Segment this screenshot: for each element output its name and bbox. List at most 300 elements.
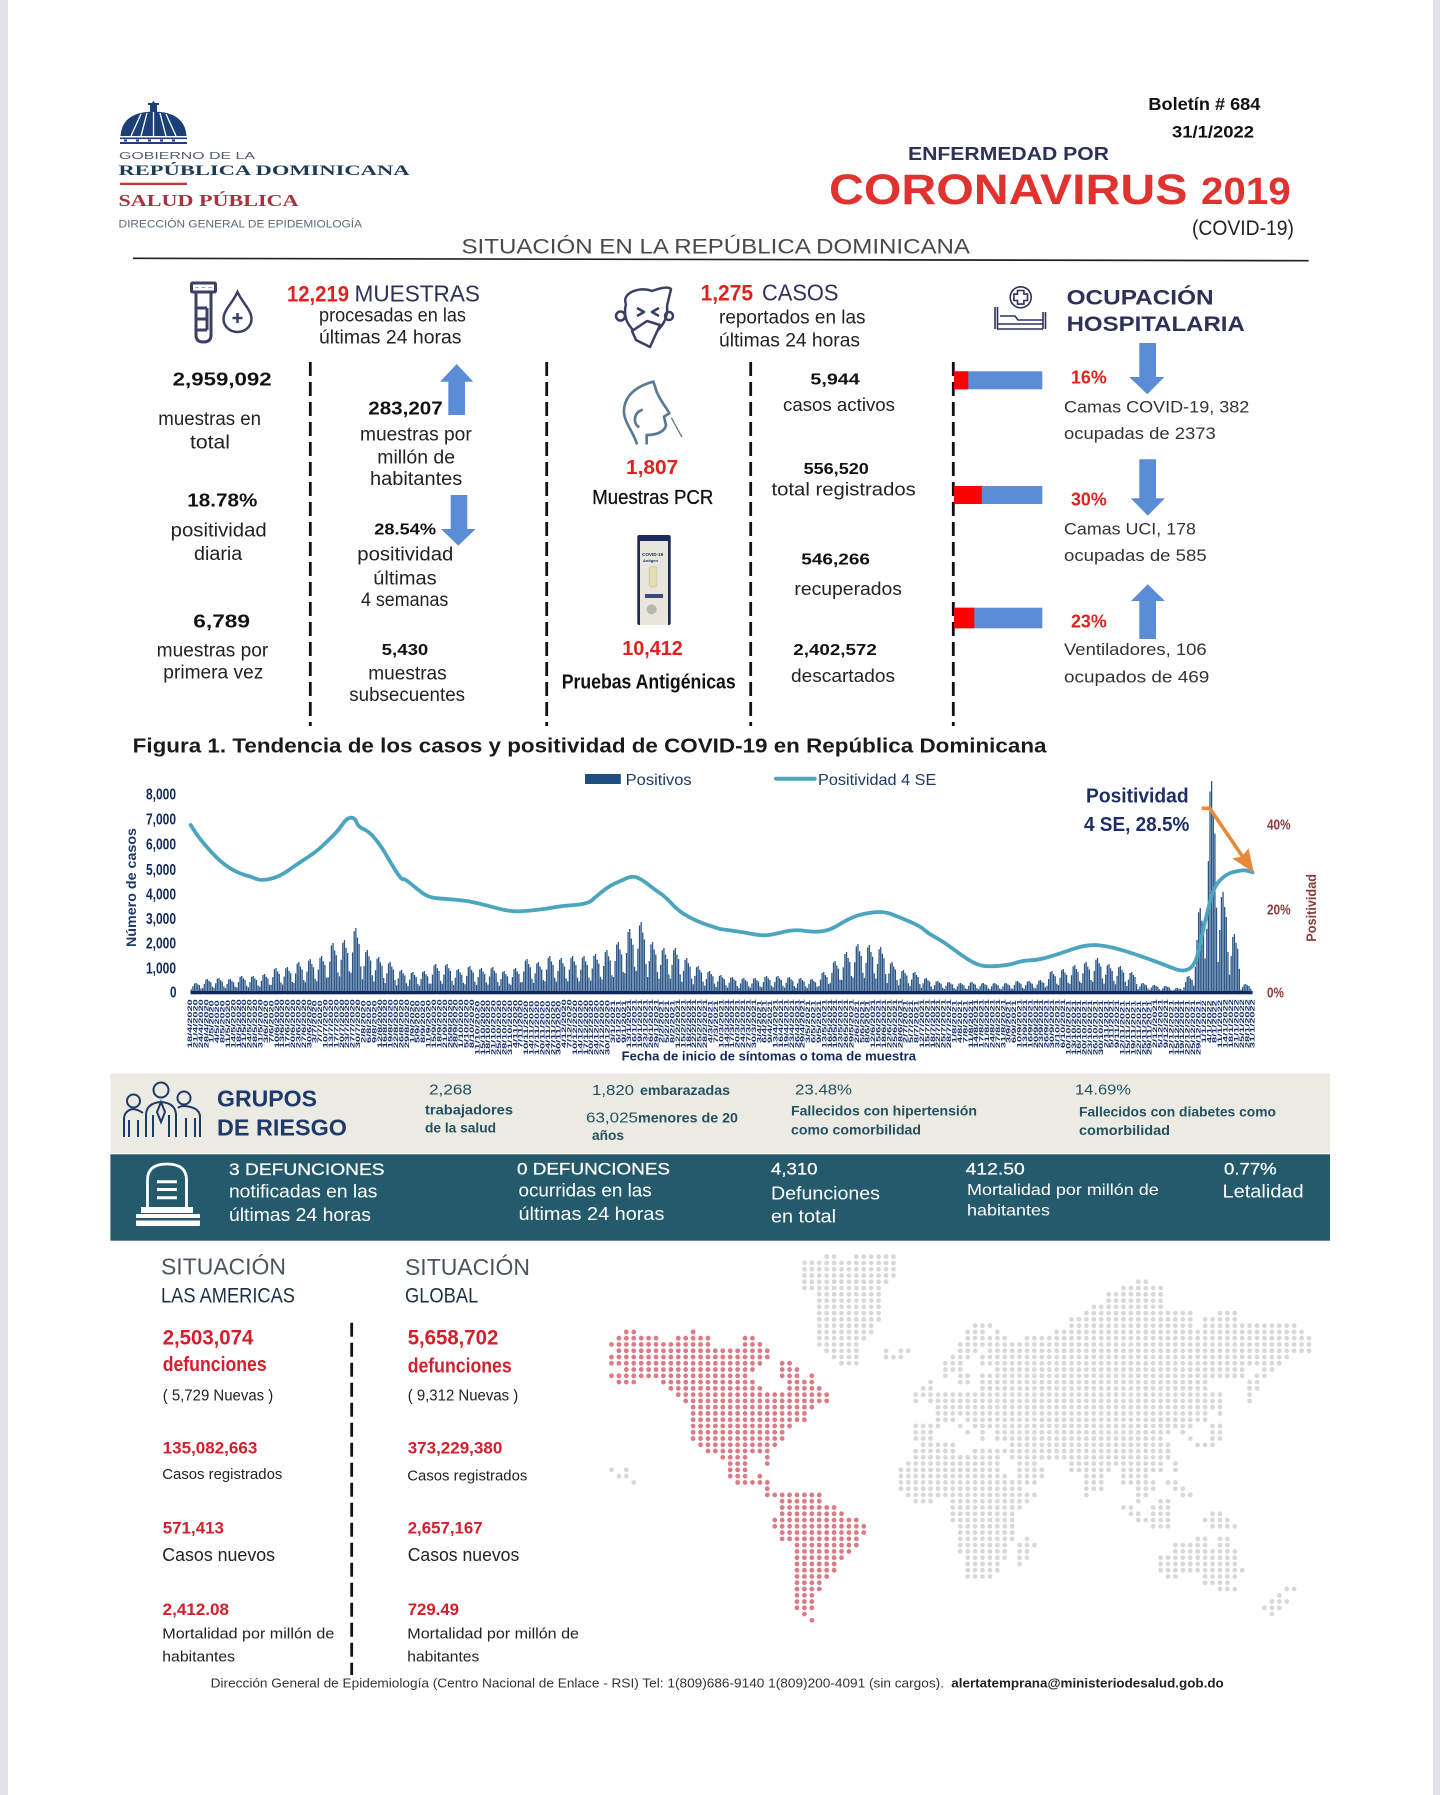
pruebas antigenicas: 10,412 xyxy=(622,637,683,660)
x axis date labels: 17/12/2020 xyxy=(583,1000,590,1055)
panel: situacion global: GLOBAL xyxy=(405,1284,478,1307)
x axis date labels: 30/6/2020 xyxy=(306,1000,313,1049)
logo: gobierno y salud publica: GOBIERNO DE LA xyxy=(119,150,255,162)
defunciones en total: 4,310 xyxy=(771,1160,818,1178)
panel: situacion global: 2,657,167 xyxy=(408,1518,483,1537)
letalidad: Letalidad xyxy=(1222,1182,1304,1202)
bulletin number and date: 31/1/2022 xyxy=(1172,122,1254,141)
x axis date labels: 7/8/2021 xyxy=(962,1000,969,1043)
x axis date labels: 31/5/2020 xyxy=(257,1000,264,1049)
x axis date labels: 15/10/2020 xyxy=(480,1000,487,1055)
defunciones ocurridas: ocurridas en las xyxy=(518,1181,652,1201)
muestras heading: MUESTRAS xyxy=(354,281,480,307)
x axis date labels: 21/4/2020 xyxy=(192,1000,199,1049)
x axis date labels: 20/7/2020 xyxy=(339,1000,346,1049)
logo: gobierno y salud publica: SALUD PÚBLICA xyxy=(118,191,299,210)
x axis date labels: 6/10/2021 xyxy=(1060,1000,1067,1049)
x axis date labels: 14/1/2022 xyxy=(1223,1000,1230,1049)
x axis date labels: 8/9/2020 xyxy=(420,1000,427,1043)
x axis date labels xyxy=(187,1000,1257,1055)
x axis date labels: 24/11/2020 xyxy=(545,1000,552,1054)
x axis date labels: 9/11/2021 xyxy=(1114,1000,1121,1048)
figure heading: Figura 1. Tendencia de los casos y positividad de COVID-19 en República Dominicana xyxy=(133,736,1047,758)
icon: tombstone xyxy=(136,1164,200,1226)
x axis date labels: 1/8/2021 xyxy=(951,1000,958,1043)
panel: situacion las americas: 571,413 xyxy=(163,1518,224,1537)
x axis date labels: 3/1/2021 xyxy=(610,1000,617,1043)
defunciones en total: en total xyxy=(771,1206,836,1226)
x axis date labels: 6/1/2021 xyxy=(615,1000,622,1043)
x axis date labels: 11/1/2022 xyxy=(1217,1000,1224,1048)
x axis date labels: 4/12/2020 xyxy=(561,1000,568,1049)
x axis date labels: 28/5/2020 xyxy=(252,1000,259,1049)
muestras heading: 12,219 xyxy=(287,282,349,307)
x axis date labels: 13/5/2021 xyxy=(821,1000,828,1049)
casos heading: 1,275 xyxy=(701,281,753,306)
diabetes: comorbilidad xyxy=(1079,1122,1170,1138)
chart: casos y positividad xyxy=(123,772,1319,1064)
left axis labels: 2,000 xyxy=(146,935,176,952)
x axis date labels: 9/1/2021 xyxy=(621,1000,628,1043)
panel: casos xyxy=(562,280,916,693)
x axis date labels: 23/9/2021 xyxy=(1038,1000,1045,1049)
x axis date labels: 17/8/2021 xyxy=(979,1000,986,1049)
icon: capitol dome xyxy=(120,101,187,144)
x axis date labels: 26/8/2020 xyxy=(398,1000,405,1049)
x axis date labels: 22/2/2021 xyxy=(691,1000,698,1049)
x axis date labels: 18/1/2022 xyxy=(1228,1000,1235,1049)
x axis date labels: 20/10/2021 xyxy=(1082,1000,1089,1055)
icon: antigen test cassette: COVID-19 xyxy=(642,552,664,557)
x axis date labels: 26/4/2021 xyxy=(794,1000,801,1049)
x axis date labels: 14/5/2020 xyxy=(230,1000,237,1049)
x axis date labels: 4/3/2021 xyxy=(708,1000,714,1043)
embarazadas y menores: embarazadas xyxy=(640,1082,730,1098)
x axis date labels: 7/7/2020 xyxy=(317,1000,324,1043)
panel: situacion las americas: 2,412.08 xyxy=(163,1600,229,1619)
x axis date labels: 8/10/2020 xyxy=(469,1000,476,1049)
x axis date labels: 7/12/2020 xyxy=(567,1000,574,1049)
x axis date labels: 11/5/2020 xyxy=(225,1000,232,1048)
x axis date labels: 24/12/2020 xyxy=(594,1000,601,1055)
annotation: positividad 28.5%: Positividad xyxy=(1086,786,1189,808)
x axis date labels: 18/10/2020 xyxy=(485,1000,492,1055)
casos activos: 5,944 xyxy=(810,372,860,389)
camas uci occupancy xyxy=(954,459,1207,565)
hipertension: como comorbilidad xyxy=(791,1121,921,1137)
mortalidad por millon: 412.50 xyxy=(966,1160,1025,1178)
casos heading: reportados en las xyxy=(719,307,866,328)
panel: muestras xyxy=(157,281,480,706)
descartados: descartados xyxy=(791,666,895,686)
panel: situacion las americas: 135,082,663 xyxy=(163,1438,257,1457)
embarazadas y menores: 63,025 xyxy=(586,1110,638,1126)
hipertension: 23.48% xyxy=(795,1082,852,1098)
x axis date labels: 25/10/2020 xyxy=(496,1000,503,1055)
left axis labels: 7,000 xyxy=(146,811,176,828)
x axis date labels: 19/8/2020 xyxy=(388,1000,395,1049)
x axis date labels: 9/5/2021 xyxy=(816,1000,823,1043)
annotation: positividad 28.5% xyxy=(1084,786,1190,836)
panel: situacion global: Mortalidad por millón de xyxy=(407,1625,579,1642)
x axis date labels: 17/7/2020 xyxy=(333,1000,340,1049)
x axis date labels: 8/2/2021 xyxy=(670,1000,677,1043)
x axis date labels: 23/7/2020 xyxy=(344,1000,351,1049)
ventiladores occupancy: Ventiladores, 106 xyxy=(1064,640,1207,659)
x axis date labels: 2/6/2021 xyxy=(854,1000,861,1043)
trabajadores de la salud xyxy=(425,1082,513,1136)
panel: situacion global: ( 9,312 Nuevas ) xyxy=(408,1388,518,1405)
x axis date labels: 11/10/2020 xyxy=(474,1000,481,1054)
left axis labels: 6,000 xyxy=(146,836,176,853)
positividad ultimas 4 semanas: positividad xyxy=(357,545,453,566)
camas covid-19 occupancy: Camas COVID-19, 382 xyxy=(1064,398,1249,417)
x axis date labels: 27/6/2020 xyxy=(301,1000,308,1049)
muestras por millon: 283,207 xyxy=(368,398,443,418)
x axis date labels: 5/10/2020 xyxy=(464,1000,471,1049)
embarazadas y menores: años xyxy=(592,1127,624,1143)
camas uci occupancy: Camas UCI, 178 xyxy=(1064,519,1196,538)
x axis date labels: 13/4/2021 xyxy=(773,1000,780,1049)
x axis date labels: 22/7/2021 xyxy=(935,1000,942,1049)
diabetes: 14.69% xyxy=(1075,1082,1131,1098)
panel: situacion las americas: 2,503,074 xyxy=(163,1326,254,1349)
panel: situacion global: 729.49 xyxy=(408,1600,459,1619)
x axis date labels: 25/11/2021 xyxy=(1141,1000,1148,1054)
x axis date labels: 12/8/2020 xyxy=(377,1000,384,1049)
x axis date labels: 25/9/2020 xyxy=(447,1000,454,1049)
logo: gobierno y salud publica: REPÚBLICA DOMINICANA xyxy=(118,162,410,179)
x axis date labels: 19/1/2021 xyxy=(637,1000,644,1049)
left axis labels xyxy=(146,786,176,1002)
x axis date labels: 21/5/2020 xyxy=(241,1000,248,1049)
x axis date labels: 11/9/2020 xyxy=(426,1000,433,1048)
icon: hospital bed xyxy=(995,287,1046,329)
title: ENFERMEDAD POR xyxy=(908,143,1109,164)
x axis date labels: 30/3/2021 xyxy=(751,1000,758,1049)
x axis date labels: 16/9/2021 xyxy=(1027,1000,1034,1049)
defunciones notificadas: últimas 24 horas xyxy=(229,1205,371,1225)
defunciones notificadas: 3 DEFUNCIONES xyxy=(229,1161,385,1179)
x axis date labels: 20/12/2020 xyxy=(588,1000,595,1055)
x axis date labels: 6/5/2021 xyxy=(811,1000,818,1043)
x axis date labels: 21/1/2022 xyxy=(1233,1000,1240,1049)
x axis date labels: 29/1/2021 xyxy=(653,1000,660,1049)
left axis labels: 8,000 xyxy=(146,786,176,803)
x axis date labels: 14/12/2020 xyxy=(577,1000,584,1055)
descartados: 2,402,572 xyxy=(793,642,877,659)
x axis date labels: 18/9/2020 xyxy=(436,1000,443,1049)
x axis date labels: 26/10/2021 xyxy=(1092,1000,1099,1055)
x axis date labels: 26/1/2021 xyxy=(648,1000,655,1049)
icon: antigen test cassette xyxy=(637,535,671,625)
total registrados xyxy=(772,461,916,500)
positividad diaria: 18.78% xyxy=(187,490,257,511)
x axis date labels: 16/5/2021 xyxy=(827,1000,834,1049)
x axis date labels: 17/3/2021 xyxy=(729,1000,736,1049)
pruebas antigenicas xyxy=(562,637,736,693)
mortalidad por millon xyxy=(966,1160,1159,1220)
x axis date labels: 25/2/2021 xyxy=(697,1000,704,1049)
pruebas antigenicas: Pruebas Antigénicas xyxy=(562,671,736,693)
x axis date labels: 12/11/2021 xyxy=(1120,1000,1127,1054)
x axis date labels: 3/9/2021 xyxy=(1006,1000,1013,1043)
panel: grupos de riesgo xyxy=(110,1073,1330,1153)
panel: situacion las americas: LAS AMERICAS xyxy=(161,1284,295,1307)
panel: situacion las americas xyxy=(161,1253,334,1666)
panel: situacion las americas: Casos registrados xyxy=(162,1466,282,1483)
x axis date labels: 29/12/2021 xyxy=(1195,1000,1202,1055)
x axis date labels: 10/12/2020 xyxy=(572,1000,579,1055)
panel: situacion global: Casos registrados xyxy=(407,1468,527,1485)
panel: situacion global xyxy=(405,1254,579,1666)
x axis date labels: 28/7/2021 xyxy=(946,1000,953,1049)
x axis date labels: 28/6/2021 xyxy=(897,1000,904,1049)
x axis date labels: 24/4/2020 xyxy=(198,1000,205,1049)
x axis date labels: 30/12/2020 xyxy=(604,1000,611,1055)
title: CORONAVIRUS xyxy=(829,166,1187,214)
x axis date labels: 8/7/2021 xyxy=(914,1000,921,1043)
descartados xyxy=(791,642,895,686)
icon: nasal swab head xyxy=(624,382,682,443)
ventiladores occupancy: ocupados de 469 xyxy=(1064,668,1209,687)
x axis date labels: 12/7/2021 xyxy=(919,1000,926,1049)
casos heading: últimas 24 horas xyxy=(719,331,860,352)
muestras en total: 2,959,092 xyxy=(173,369,272,390)
logo: gobierno y salud publica: DIRECCIÓN GENERAL DE EPIDEMIOLOGÍA xyxy=(118,218,363,231)
map: americas highlighted in red xyxy=(612,1332,864,1620)
left axis labels: 5,000 xyxy=(146,862,176,879)
casos activos xyxy=(783,372,895,415)
defunciones notificadas xyxy=(229,1161,385,1225)
muestras pcr: Muestras PCR xyxy=(592,487,713,509)
chart legend xyxy=(585,772,936,789)
panel: situacion las americas: habitantes xyxy=(162,1649,235,1666)
icon: antigen test cassette: Antigen xyxy=(643,558,658,563)
embarazadas y menores: menores de 20 xyxy=(638,1109,738,1125)
recuperados: recuperados xyxy=(794,579,902,599)
muestras subsecuentes: muestras xyxy=(368,663,447,684)
positividad ultimas 4 semanas: 4 semanas xyxy=(361,590,448,611)
x axis date labels: 9/8/2020 xyxy=(371,1000,378,1043)
x axis date labels: 21/9/2020 xyxy=(442,1000,449,1049)
x axis date labels: 10/3/2021 xyxy=(718,1000,725,1049)
x axis date labels: 26/5/2021 xyxy=(843,1000,850,1049)
x axis date labels: 6/4/2021 xyxy=(762,1000,769,1043)
x axis date labels: 2/2/2021 xyxy=(659,1000,666,1043)
panel: situacion las americas: SITUACIÓN xyxy=(161,1253,286,1279)
annotation: positividad 28.5%: 4 SE, 28.5% xyxy=(1084,814,1190,836)
title: (COVID-19) xyxy=(1192,217,1294,240)
x axis date labels: 23/1/2021 xyxy=(642,1000,649,1049)
x axis date labels: 23/10/2021 xyxy=(1087,1000,1094,1055)
dotted world map xyxy=(612,1257,1309,1620)
x axis date labels: 8/1/2022 xyxy=(1212,1000,1219,1043)
x axis date labels: 23/4/2021 xyxy=(789,1000,796,1049)
embarazadas y menores: 1,820 xyxy=(592,1083,634,1099)
right axis labels: 20% xyxy=(1267,901,1291,918)
x axis date labels: 9/4/2021 xyxy=(767,1000,774,1043)
x axis date labels: 20/11/2020 xyxy=(539,1000,546,1054)
x axis date labels: 12/12/2021 xyxy=(1168,1000,1175,1055)
x axis date labels: 28/2/2021 xyxy=(702,1000,709,1049)
muestras en total xyxy=(158,369,272,453)
positividad diaria xyxy=(171,490,267,565)
line: positividad 4 SE xyxy=(191,818,1253,970)
x axis date labels: 15/11/2021 xyxy=(1125,1000,1132,1054)
x axis date labels: 19/5/2021 xyxy=(832,1000,839,1049)
panel: situacion global: 5,658,702 xyxy=(408,1326,498,1349)
x axis date labels: 1/10/2020 xyxy=(458,1000,465,1049)
map: rest of world in gray xyxy=(612,1257,1309,1614)
diabetes: Fallecidos con diabetes como xyxy=(1079,1104,1276,1120)
x axis date labels: 29/5/2021 xyxy=(848,1000,855,1049)
x axis date labels: 31/10/2020 xyxy=(507,1000,514,1055)
x axis date labels: 31/1/2022 xyxy=(1250,1000,1257,1049)
x axis date labels: 10/10/2021 xyxy=(1065,1000,1072,1055)
camas covid-19 occupancy: ocupadas de 2373 xyxy=(1064,424,1216,443)
x axis date labels: 22/12/2021 xyxy=(1185,1000,1192,1055)
muestras por millon: muestras por xyxy=(360,425,472,446)
x axis date labels: 18/5/2020 xyxy=(236,1000,243,1049)
x axis date labels: 5/7/2021 xyxy=(908,1000,915,1043)
embarazadas y menores xyxy=(586,1082,738,1143)
x axis date labels: 31/8/2021 xyxy=(1000,1000,1007,1049)
ventiladores occupancy xyxy=(954,584,1209,687)
panel: situacion las americas: Casos nuevos xyxy=(162,1544,275,1565)
mortalidad por millon: Mortalidad por millón de xyxy=(967,1182,1159,1199)
x axis date labels: 3/6/2020 xyxy=(263,1000,270,1043)
diabetes xyxy=(1075,1082,1276,1138)
x axis date labels: 19/12/2021 xyxy=(1179,1000,1186,1055)
x axis date labels: 18/7/2021 xyxy=(930,1000,937,1049)
x axis date labels: 30/7/2020 xyxy=(355,1000,362,1049)
icon: face with mask xyxy=(616,288,673,347)
positividad diaria: positividad xyxy=(171,521,267,542)
x axis date labels: 1/1/2022 xyxy=(1201,1000,1208,1043)
ocupacion heading: HOSPITALARIA xyxy=(1067,313,1245,336)
x axis date labels: 15/6/2021 xyxy=(876,1000,883,1049)
right axis labels: 0% xyxy=(1267,985,1284,1002)
recuperados xyxy=(794,551,902,599)
left axis labels: 1,000 xyxy=(146,960,176,977)
x axis date labels: 15/7/2021 xyxy=(924,1000,931,1049)
panel: situacion las americas: defunciones xyxy=(163,1354,267,1376)
x axis date labels: 10/7/2020 xyxy=(323,1000,330,1049)
x axis date labels: 10/11/2020 xyxy=(523,1000,530,1054)
positividad diaria: diaria xyxy=(194,544,243,565)
x axis date labels: 30/10/2021 xyxy=(1098,1000,1105,1055)
x axis date labels: 7/6/2020 xyxy=(268,1000,275,1043)
x axis date labels: 1/5/2020 xyxy=(209,1000,216,1043)
muestras por millon: millón de xyxy=(377,447,455,468)
x axis date labels: 29/8/2020 xyxy=(404,1000,411,1049)
x axis date labels: 21/10/2020 xyxy=(491,1000,498,1055)
positividad ultimas 4 semanas xyxy=(357,521,453,611)
x axis date labels: 28/9/2020 xyxy=(453,1000,460,1049)
x axis date labels: 2/7/2021 xyxy=(903,1000,910,1043)
x axis date labels: 3/4/2021 xyxy=(756,1000,763,1043)
x axis date labels: 13/9/2021 xyxy=(1022,1000,1029,1049)
x axis date labels: 4/11/2020 xyxy=(512,1000,519,1048)
footer contact line: alertatemprana@ministeriodesalud.gob.do xyxy=(951,1676,1224,1690)
x axis date labels: 12/2/2021 xyxy=(675,1000,682,1049)
x axis date labels: 25/1/2022 xyxy=(1239,1000,1246,1049)
ocupacion heading xyxy=(1067,285,1245,336)
footer contact line xyxy=(211,1676,1224,1690)
x axis title: Fecha de inicio de síntomas o toma de muestra xyxy=(622,1049,917,1064)
x axis date labels: 3/5/2021 xyxy=(805,1000,812,1043)
positividad ultimas 4 semanas: 28.54% xyxy=(374,521,436,538)
grupos de riesgo heading: GRUPOS xyxy=(217,1086,317,1112)
left axis title: Número de casos xyxy=(123,828,139,947)
x axis date labels: 6/8/2020 xyxy=(366,1000,373,1043)
camas uci occupancy: ocupadas de 585 xyxy=(1064,546,1207,565)
x axis date labels: 8/5/2020 xyxy=(220,1000,227,1043)
x axis date labels: 30/9/2021 xyxy=(1049,1000,1056,1049)
x axis date labels: 6/9/2021 xyxy=(1011,1000,1018,1043)
muestras en total: muestras en xyxy=(158,409,261,430)
x axis date labels: 16/1/2021 xyxy=(632,1000,639,1049)
right axis labels xyxy=(1267,816,1291,1002)
camas uci occupancy: 30% xyxy=(1071,490,1107,510)
hipertension xyxy=(791,1082,977,1137)
panel: situacion global: defunciones xyxy=(408,1355,512,1377)
chart legend: Positividad 4 SE xyxy=(818,772,936,789)
muestras pcr xyxy=(592,456,713,509)
x axis date labels: 2/12/2021 xyxy=(1152,1000,1159,1049)
right axis labels: 40% xyxy=(1267,816,1291,833)
x axis date labels: 12/6/2021 xyxy=(870,1000,877,1049)
x axis date labels: 27/7/2020 xyxy=(350,1000,357,1049)
left axis labels: 3,000 xyxy=(146,911,176,928)
x axis date labels: 30/11/2020 xyxy=(556,1000,563,1054)
recuperados: 546,266 xyxy=(801,551,870,568)
x axis date labels: 25/12/2021 xyxy=(1190,1000,1197,1055)
x axis date labels: 5/9/2020 xyxy=(415,1000,422,1043)
chart legend: Positivos xyxy=(626,772,692,789)
ventiladores occupancy: 23% xyxy=(1071,611,1107,631)
x axis date labels: 13/1/2021 xyxy=(626,1000,633,1049)
panel: situacion global: SITUACIÓN xyxy=(405,1254,530,1280)
x axis date labels: 20/9/2021 xyxy=(1033,1000,1040,1049)
defunciones ocurridas xyxy=(517,1160,670,1224)
muestras por primera vez: 6,789 xyxy=(193,611,250,632)
x axis date labels: 16/8/2020 xyxy=(382,1000,389,1049)
letalidad xyxy=(1222,1160,1304,1202)
x axis date labels: 23/6/2020 xyxy=(295,1000,302,1049)
x axis date labels: 18/4/2020 xyxy=(187,1000,194,1049)
x axis date labels: 3/10/2021 xyxy=(1054,1000,1062,1049)
x axis date labels: 17/6/2020 xyxy=(285,1000,292,1049)
muestras en total: total xyxy=(190,432,230,453)
x axis date labels: 27/8/2021 xyxy=(995,1000,1002,1049)
muestras pcr: 1,807 xyxy=(626,456,678,479)
grupos de riesgo heading xyxy=(217,1086,347,1141)
x axis date labels: 22/6/2021 xyxy=(886,1000,893,1049)
x axis date labels: 2/11/2021 xyxy=(1103,1000,1110,1048)
x axis date labels: 27/3/2021 xyxy=(745,1000,752,1049)
trabajadores de la salud: trabajadores xyxy=(425,1101,513,1117)
positividad ultimas 4 semanas: últimas xyxy=(373,568,437,589)
x axis date labels: 14/11/2020 xyxy=(529,1000,536,1054)
logo: gobierno y salud publica xyxy=(118,101,410,231)
mortalidad por millon: habitantes xyxy=(967,1203,1050,1220)
panel: situacion global: habitantes xyxy=(407,1649,479,1666)
x axis date labels: 28/1/2022 xyxy=(1244,1000,1251,1049)
muestras heading: procesadas en las xyxy=(319,306,466,327)
x axis date labels: 29/4/2021 xyxy=(800,1000,807,1049)
